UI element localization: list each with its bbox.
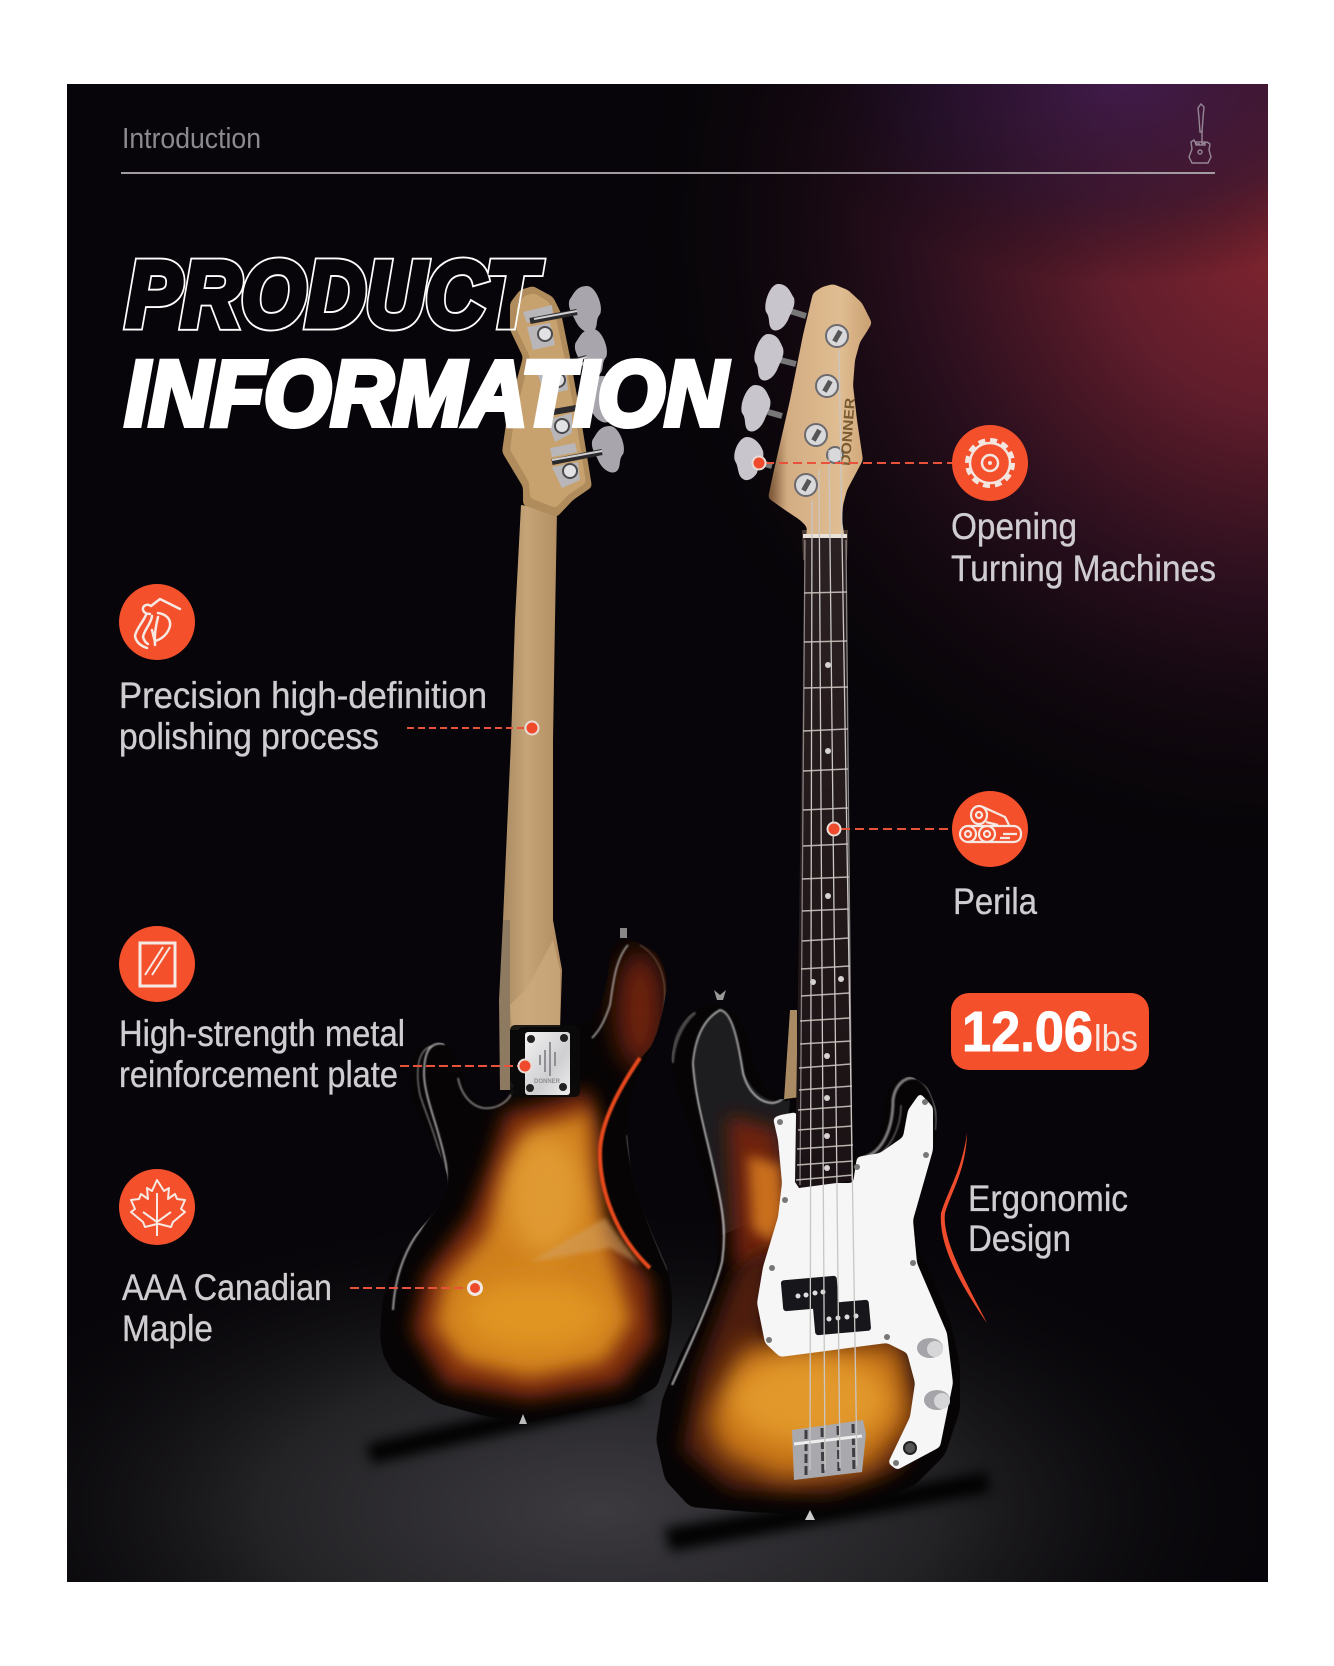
front body [656,1008,960,1513]
callout: Ergonomic Design [941,1133,1128,1323]
pickguard [757,1093,953,1470]
back tuner hardware [523,305,602,488]
strap button [805,1510,815,1520]
fret dots [810,662,844,1171]
bridge [792,1420,866,1480]
callout: Ergonomic Design: Ergonomic [968,1178,1128,1219]
callout: AAA Canadian Maple: AAA Canadian [122,1267,332,1308]
header divider line [121,172,1215,174]
neck plate: DONNER [534,1079,561,1085]
callout: Precision polishing: polishing process [119,716,379,757]
back side wall crescent [601,1046,658,1272]
strings [800,350,857,1470]
back headstock [502,286,592,517]
callout: Opening Turning Machines: Turning Machines [951,548,1216,589]
header label: Introduction: Introduction [122,123,261,155]
badge: weight 12.06 lbs: 12.06 [962,1000,1093,1064]
icon: maple leaf [131,1180,185,1236]
front neck wood sliver [784,1010,797,1100]
icon: polishing hand [135,599,180,648]
callout: metal reinforcement plate: reinforcement plate [119,1054,398,1095]
front gloss highlights [672,1010,936,1385]
callout: Perila: Perila [953,881,1037,922]
back strap buttons [519,1414,527,1424]
fretboard [795,536,853,1188]
icon: small bass guitar outline [1189,104,1211,163]
back neck [503,505,562,1030]
callout: AAA Canadian Maple: Maple [122,1308,213,1349]
front tuner posts [795,325,848,496]
knobs [904,1338,950,1454]
icon: metal plate [140,943,175,986]
callout: Perila [828,791,1037,922]
frets [796,592,853,1180]
callout: AAA Canadian Maple [119,1169,482,1349]
icon: logs [960,806,1021,842]
badge: weight 12.06 lbs [951,993,1149,1070]
back pegs [569,286,624,473]
back gloss highlights [393,945,668,1310]
callout: Opening Turning Machines: Opening [951,506,1077,547]
callout: Opening Turning Machines [752,425,1216,589]
callout: metal reinforcement plate: High-strength metal [119,1013,405,1054]
back body [380,940,672,1418]
pickguard screws [766,1099,929,1466]
guitar: back view [360,286,690,1435]
front pegs [758,311,806,466]
pickups [781,1276,871,1335]
guitar: front view [640,284,980,1525]
callout: Precision polishing: Precision high-definition [119,675,487,716]
callout: Ergonomic Design: Design [968,1218,1071,1259]
badge: weight 12.06 lbs: lbs [1094,1018,1138,1059]
icon: gear [967,440,1013,486]
front headstock [768,284,872,540]
neck plate [510,1025,580,1097]
callout: Precision polishing [119,584,538,757]
title: INFORMATION solid: INFORMATION [125,343,729,445]
headstock logo: DONNER [837,397,858,466]
callout: metal reinforcement plate [119,926,532,1095]
title: PRODUCT outlined: PRODUCT [126,242,542,346]
